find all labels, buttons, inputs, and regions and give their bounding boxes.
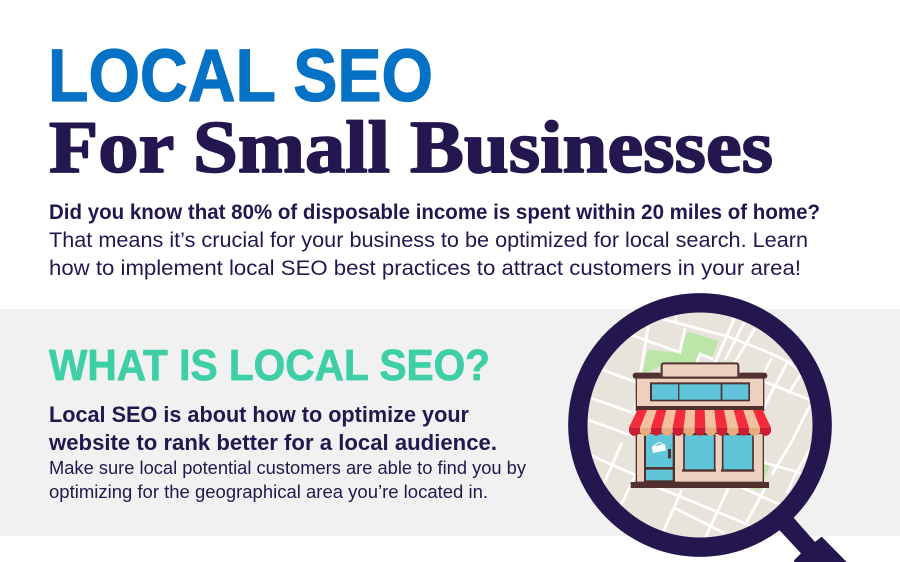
intro text: how to implement local SEO best practices to attract customers in your area!	[49, 256, 801, 280]
sign board	[662, 363, 738, 378]
map	[588, 312, 812, 538]
definition text	[48, 402, 526, 502]
icon: magnifying glass over map and storefront	[578, 303, 853, 562]
definition text: Local SEO is about how to optimize your	[49, 402, 469, 427]
definition text: Make sure local potential customers are able to find you by	[49, 458, 526, 478]
lens ring	[578, 303, 822, 547]
definition text: optimizing for the geographical area you’re located in.	[49, 482, 488, 502]
shop windows	[682, 434, 754, 472]
intro text: Did you know that 80% of disposable income is spent within 20 miles of home?	[49, 200, 820, 224]
intro text	[49, 200, 820, 280]
striped awning	[629, 410, 771, 436]
storefront	[629, 363, 771, 488]
handle	[779, 517, 853, 562]
heading: what is local SEO: WHAT IS LOCAL SEO?	[49, 341, 490, 390]
definition text: website to rank better for a local audience.	[48, 430, 497, 455]
upper window	[650, 382, 750, 401]
title: For Small Businesses	[49, 107, 773, 189]
cornice	[633, 373, 767, 379]
intro text: That means it’s crucial for your business to be optimized for local search. Learn	[49, 228, 808, 252]
base	[631, 482, 769, 488]
title	[48, 34, 773, 189]
panel: what is local SEO	[0, 309, 900, 536]
door	[644, 434, 675, 482]
title: LOCAL SEO	[48, 34, 433, 117]
lower wall	[636, 433, 763, 482]
upper wall	[636, 378, 764, 410]
